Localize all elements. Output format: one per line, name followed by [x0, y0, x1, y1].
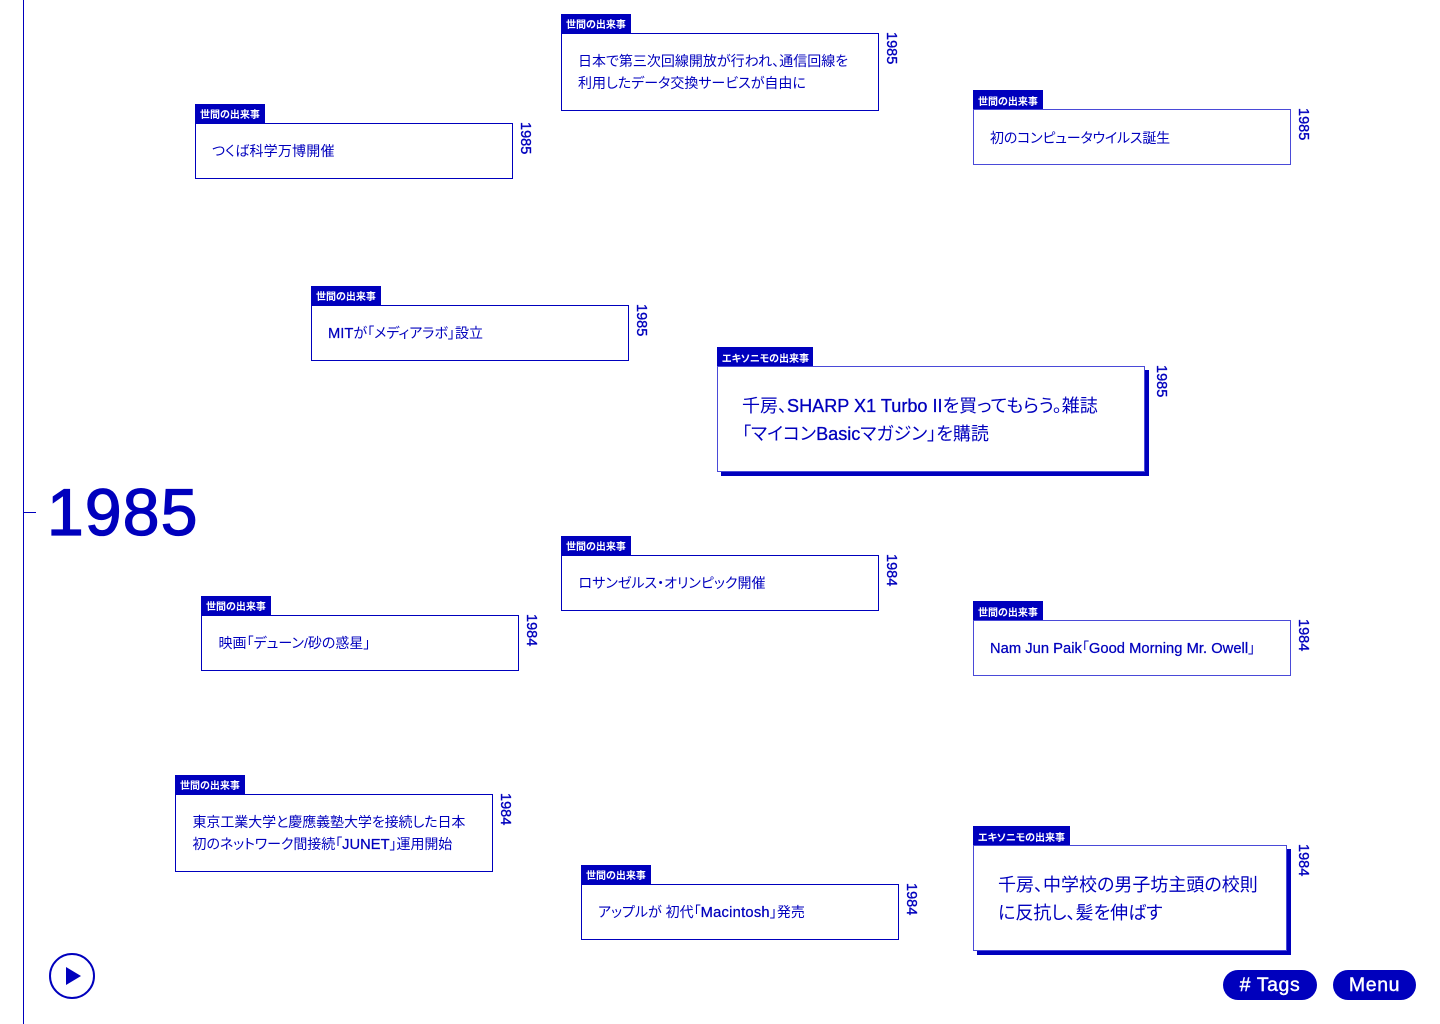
- category tag: [195, 104, 265, 123]
- event text: 千房、SHARP X1 Turbo IIを買ってもらう。雑誌: [742, 396, 1098, 416]
- category tag: 世間の出来事: [586, 871, 646, 882]
- featured card: SHARP X1 Turbo II: [717, 347, 1169, 476]
- event text: [717, 366, 1145, 472]
- year label: 1984: [497, 793, 513, 825]
- year label: 1985: [1153, 365, 1169, 397]
- timeline tick: [23, 512, 36, 513]
- category tag: [581, 865, 651, 884]
- year label: 1984: [903, 883, 919, 915]
- event text: [973, 620, 1291, 676]
- event text: ロサンゼルス・オリンピック開催: [578, 575, 765, 591]
- event text: 東京工業大学と慶應義塾大学を接続した日本: [192, 814, 465, 830]
- year label: 1984: [1295, 844, 1311, 876]
- event text: アップルが 初代「Macintosh」発売: [598, 904, 805, 921]
- category tag: [201, 596, 271, 615]
- card: Nam June Paik: [973, 601, 1311, 676]
- event text: [311, 305, 629, 361]
- category tag: 世間の出来事: [200, 110, 260, 121]
- event text: [973, 109, 1291, 165]
- category tag: エキソニモの出来事: [722, 354, 809, 365]
- year label: 1985: [883, 32, 899, 64]
- event text: 映画「デューン/砂の惑星」: [218, 635, 370, 651]
- event text: に反抗し、髪を伸ばす: [998, 903, 1163, 923]
- year label: 1984: [883, 554, 899, 586]
- category tag: エキソニモの出来事: [978, 833, 1065, 844]
- card: film Dune: [201, 596, 539, 671]
- category tag: [561, 14, 631, 33]
- event text: [581, 884, 899, 940]
- category tag: 世間の出来事: [566, 20, 626, 31]
- card: MIT Media Lab: [311, 286, 649, 361]
- category tag: 世間の出来事: [978, 608, 1038, 619]
- card: JUNET: [175, 775, 513, 872]
- category tag: 世間の出来事: [316, 292, 376, 303]
- icon: play button: [49, 953, 95, 999]
- category tag: [717, 347, 813, 366]
- category tag: 世間の出来事: [206, 602, 266, 613]
- category tag: [175, 775, 245, 794]
- card: Japan data network: [561, 14, 899, 111]
- event text: [201, 615, 519, 671]
- event text: 利用したデータ交換サービスが自由に: [578, 75, 806, 91]
- current year heading: 1985: [47, 475, 199, 549]
- card: Los Angeles Olympics: [561, 536, 899, 611]
- event text: MITが「メディアラボ」設立: [328, 325, 483, 342]
- year label: 1985: [633, 304, 649, 336]
- card: first computer virus: [973, 90, 1311, 165]
- year label: 1984: [523, 614, 539, 646]
- event text: つくば科学万博開催: [212, 143, 335, 159]
- category tag: 世間の出来事: [566, 542, 626, 553]
- year label: 1984: [1295, 619, 1311, 651]
- card shadow: [977, 849, 1291, 955]
- event text: Nam Jun Paik「Good Morning Mr. Owell」: [990, 640, 1255, 657]
- event text: 初のコンピュータウイルス誕生: [990, 130, 1170, 146]
- event text: [561, 33, 879, 111]
- year label: 1985: [517, 122, 533, 154]
- category tag: 世間の出来事: [180, 781, 240, 792]
- category tag: [311, 286, 381, 305]
- card shadow: [721, 370, 1149, 476]
- category tag: [973, 601, 1043, 620]
- button: menu: Menu: [1349, 974, 1400, 996]
- event text: [195, 123, 513, 179]
- event text: [175, 794, 493, 872]
- event text: 初のネットワーク間接続「JUNET」運用開始: [192, 836, 452, 853]
- category tag: [561, 536, 631, 555]
- event text: [973, 845, 1287, 951]
- button: tags: # Tags: [1240, 974, 1300, 996]
- button: tags: [1223, 970, 1317, 1000]
- event text: 千房、中学校の男子坊主頭の校則: [998, 875, 1258, 895]
- button: menu: [1333, 970, 1416, 1000]
- timeline axis: [23, 0, 24, 1024]
- event text: [561, 555, 879, 611]
- category tag: [973, 90, 1043, 109]
- event text: 日本で第三次回線開放が行われ、通信回線を: [578, 53, 848, 69]
- card: Tsukuba Expo: [195, 104, 533, 179]
- category tag: [973, 826, 1070, 845]
- year label: 1985: [1295, 108, 1311, 140]
- card: Apple Macintosh: [581, 865, 919, 940]
- event text: 「マイコンBasicマガジン」を購読: [742, 424, 989, 444]
- featured card: school rules protest: [973, 826, 1311, 955]
- category tag: 世間の出来事: [978, 97, 1038, 108]
